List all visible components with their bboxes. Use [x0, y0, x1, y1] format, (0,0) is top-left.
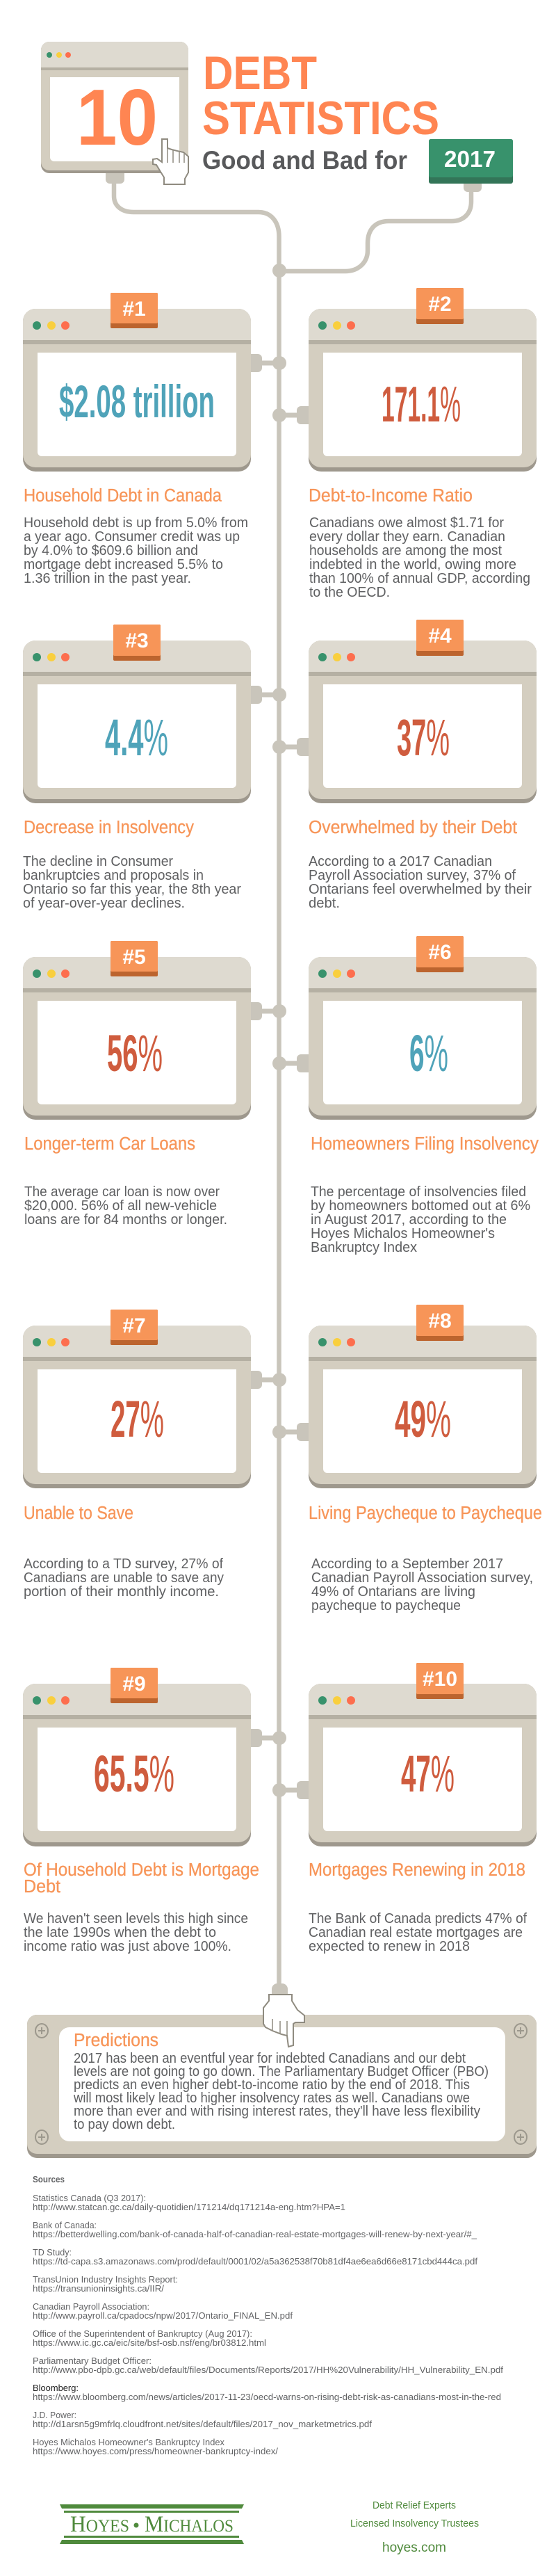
sources: TD Study: [33, 2247, 72, 2257]
sources: http://www.statcan.gc.ca/daily-quotidien/171214/dq171214a-eng.htm?HPA=1 [33, 2202, 345, 2212]
text block [73, 2051, 489, 2132]
sources: https://td-capa.s3.amazonaws.com/prod/default/0001/02/a5a362538f70b81df4ae6ea6d66e8171cbd444ca.pdf [33, 2256, 477, 2267]
panel: statistic 9 [23, 1668, 286, 1954]
window with number 10: 10 [76, 74, 158, 162]
value: $2.08 trillion [59, 376, 215, 427]
text block: According to a 2017 Canadian [309, 853, 492, 869]
footer tagline: Debt Relief Experts [373, 2499, 456, 2511]
sources: Hoyes Michalos Homeowner's Bankruptcy Index [33, 2437, 224, 2447]
text block: The average car loan is now over [24, 1184, 220, 1200]
icon: screws [35, 2024, 527, 2144]
window [23, 957, 251, 1120]
sources: https://transunioninsights.ca/IIR/ [33, 2283, 164, 2294]
sources: http://www.pbo-dpb.gc.ca/web/default/files/Documents/Reports/2017/HH%20Vulnerability/HH_Vulnerability_EN.pdf [33, 2365, 503, 2375]
sources: https://www.hoyes.com/press/homeowner-bankruptcy-index/ [33, 2446, 278, 2456]
panel: predictions [27, 1983, 537, 2158]
badge [416, 620, 464, 656]
window [309, 957, 537, 1120]
heading: Longer-term Car Loans [24, 1134, 195, 1154]
badge: #3 [125, 629, 149, 652]
text block: bankruptcies and proposals in [23, 867, 204, 883]
heading: Mortgages Renewing in 2018 [309, 1860, 525, 1880]
heading: Debt [24, 1877, 60, 1897]
badge [416, 1663, 464, 1699]
panel: statistic 6 [272, 936, 539, 1255]
text block: than 100% of annual GDP, according [309, 570, 530, 586]
text block: Hoyes Michalos Homeowner's [311, 1225, 495, 1241]
badge [416, 1305, 464, 1341]
badge: #8 [428, 1310, 452, 1333]
plug: header window [106, 170, 124, 184]
text block [24, 1184, 227, 1227]
window with number 10 [41, 42, 188, 173]
heading: Of Household Debt is Mortgage [24, 1860, 259, 1880]
window [309, 641, 537, 803]
text block [309, 853, 532, 911]
panel: statistic 1 [23, 293, 286, 586]
sources: Office of the Superintendent of Bankruptcy (Aug 2017): [33, 2328, 252, 2339]
badge [416, 288, 464, 324]
value: 56% [107, 1024, 163, 1082]
title: STATISTICS [202, 92, 439, 145]
panel: statistic 8 [272, 1305, 542, 1613]
badge [111, 1310, 158, 1345]
text block: by homeowners bottomed out at 6% [311, 1198, 530, 1214]
text block: Canadian Payroll Association survey, [311, 1570, 533, 1586]
text block: levels are not going to go down. The Parliamentary Budget Officer (PBO) [74, 2064, 489, 2079]
heading: Predictions [74, 2031, 158, 2050]
panel: statistic 4 [272, 620, 537, 911]
window [23, 309, 251, 472]
text block: more than ever and with rising interest rates, they'll have less flexibility [74, 2104, 480, 2119]
text block: Household debt is up from 5.0% from [24, 515, 248, 531]
panel: statistic 10 [272, 1663, 537, 1954]
value: 65.5% [94, 1745, 174, 1803]
text block: The decline in Consumer [23, 853, 173, 869]
badge: #7 [122, 1314, 146, 1337]
value: 47% [401, 1745, 455, 1803]
text block: 49% of Ontarians are living [311, 1584, 475, 1600]
header wire node [272, 264, 286, 277]
value: 6% [409, 1024, 448, 1082]
connector [272, 738, 309, 756]
text block: debt. [309, 895, 340, 911]
sources: Parliamentary Budget Officer: [33, 2356, 152, 2366]
text block [309, 515, 530, 600]
connector [251, 1002, 286, 1020]
text block [311, 1556, 533, 1613]
sources: https://www.bloomberg.com/news/articles/2017-11-23/oecd-warns-on-rising-debt-risk-as-canadians-most-in-the-red [33, 2392, 501, 2402]
text block: Ontario so far this year, the 8th year [23, 881, 241, 897]
heading: Living Paycheque to Paycheque [309, 1504, 542, 1523]
value: 4.4% [105, 709, 168, 766]
text block: every dollar they earn. Canadian [309, 529, 505, 545]
connector [272, 1423, 309, 1441]
sources: TransUnion Industry Insights Report: [33, 2274, 178, 2285]
year badge [429, 139, 513, 184]
text block: We haven't seen levels this high since [24, 1910, 248, 1926]
header [41, 42, 513, 277]
text block: Canadians are unable to save any [24, 1570, 224, 1586]
icon: pointing hand [263, 1995, 304, 2047]
icon: pointer hand [153, 139, 188, 184]
heading: Unable to Save [24, 1504, 133, 1523]
connector [251, 1371, 286, 1389]
badge: #5 [122, 946, 146, 969]
footer tagline [350, 2499, 479, 2555]
sources: http://d1arsn5g9mfrlq.cloudfront.net/sites/default/files/2017_nov_marketmetrics.pdf [33, 2419, 372, 2429]
badge: #9 [122, 1673, 146, 1696]
text block: paycheque to paycheque [311, 1597, 461, 1613]
badge [111, 941, 158, 976]
window [309, 1684, 537, 1846]
text block: The Bank of Canada predicts 47% of [309, 1910, 527, 1926]
plaque frame [27, 2015, 537, 2158]
logo: Hoyes Michalos: HOYES [70, 2512, 129, 2537]
footer tagline: Licensed Insolvency Trustees [350, 2518, 479, 2529]
heading: Decrease in Insolvency [24, 818, 194, 837]
text block: indebted in the world, owing more [309, 556, 516, 572]
text block: portion of their monthly income. [24, 1584, 219, 1600]
text block: to pay down debt. [74, 2117, 175, 2132]
sources: J.D. Power: [33, 2410, 76, 2420]
value: 49% [395, 1390, 451, 1448]
panel: statistic 2 [272, 288, 537, 600]
sources: http://www.payroll.ca/cpadocs/npw/2017/Ontario_FINAL_EN.pdf [33, 2310, 293, 2321]
plug: year badge [464, 182, 482, 192]
badge [111, 1668, 158, 1703]
value: 27% [111, 1390, 164, 1448]
text block: The percentage of insolvencies filed [311, 1184, 526, 1200]
text block: Ontarians feel overwhelmed by their [309, 881, 532, 897]
text block: mortgage debt increased 5.5% to [24, 556, 223, 572]
panel: statistic 5 [23, 941, 286, 1227]
value: 37% [397, 709, 450, 766]
text block: will most likely lead to higher insolvency rates as well. Canadians owe [73, 2091, 470, 2106]
text block: of year-over-year declines. [23, 895, 185, 911]
sources: Statistics Canada (Q3 2017): [33, 2193, 146, 2203]
text block: Canadians owe almost $1.71 for [309, 515, 504, 531]
sources: https://www.ic.gc.ca/eic/site/bsf-osb.nsf/eng/br03812.html [33, 2337, 266, 2348]
plug: predictions [272, 1983, 288, 1995]
text block: by 4.0% to $609.6 billion and [24, 542, 198, 558]
badge [416, 936, 464, 972]
text block [23, 853, 241, 911]
text block [311, 1184, 530, 1255]
text block: 2017 has been an eventful year for indebted Canadians and our debt [74, 2051, 466, 2066]
badge: #1 [122, 298, 146, 321]
text block: the late 1990s when the debt to [24, 1924, 216, 1940]
sources: https://betterdwelling.com/bank-of-canada-half-of-canadian-real-estate-mortgages-will-renew-by-next-year/#_ [33, 2229, 477, 2239]
value: 171.1% [382, 377, 461, 433]
sources: Sources [33, 2174, 65, 2184]
text block: 1.36 trillion in the past year. [24, 570, 191, 586]
text block [24, 1556, 224, 1600]
title: DEBT [203, 47, 317, 99]
badge [111, 293, 158, 328]
text block: expected to renew in 2018 [309, 1938, 470, 1954]
year badge: 2017 [444, 146, 496, 172]
text block: $20,000. 56% of all new-vehicle [24, 1198, 217, 1214]
heading: Debt-to-Income Ratio [309, 486, 473, 506]
text block: to the OECD. [309, 584, 390, 600]
text block: households are among the most [309, 542, 502, 558]
sources: Canadian Payroll Association: [33, 2301, 149, 2312]
window [309, 1326, 537, 1488]
title: Good and Bad for [202, 146, 407, 175]
connector wires and central line [114, 182, 471, 1986]
sources [33, 2174, 503, 2456]
sources: Bloomberg: [33, 2383, 79, 2393]
connector [272, 1781, 309, 1799]
window [23, 641, 251, 803]
logo: Hoyes Michalos [60, 2504, 244, 2544]
text block: According to a TD survey, 27% of [24, 1556, 223, 1572]
connector [251, 354, 286, 372]
text block [24, 515, 248, 586]
heading: Household Debt in Canada [24, 486, 222, 506]
text block: predicts an even higher debt-to-income ratio by the end of 2018. This [74, 2077, 470, 2093]
text block: Payroll Association survey, 37% of [309, 867, 516, 883]
text block: According to a September 2017 [311, 1556, 503, 1572]
footer tagline: hoyes.com [382, 2541, 446, 2555]
sources: Bank of Canada: [33, 2220, 97, 2230]
connector [272, 1054, 309, 1072]
text block: in August 2017, according to the [311, 1211, 507, 1227]
badge: #6 [428, 941, 452, 964]
heading: Homeowners Filing Insolvency [311, 1134, 539, 1154]
connector [272, 406, 309, 424]
window [23, 1326, 251, 1488]
badge: #4 [428, 625, 452, 647]
text block: Canadian real estate mortgages are [309, 1924, 523, 1940]
title [202, 47, 439, 175]
text block: Bankruptcy Index [311, 1239, 418, 1255]
panel: statistic 3 [23, 625, 286, 911]
badge [113, 625, 161, 661]
text block [309, 1910, 527, 1954]
text block: income ratio was just above 100%. [24, 1938, 231, 1954]
logo: Hoyes Michalos: MICHALOS [145, 2512, 234, 2537]
panel: statistic 7 [23, 1310, 286, 1600]
badge: #2 [428, 293, 452, 316]
text block: a year ago. Consumer credit was up [24, 529, 240, 545]
window [23, 1684, 251, 1846]
badge: #10 [423, 1668, 457, 1691]
text block: loans are for 84 months or longer. [24, 1211, 227, 1227]
connector [251, 1729, 286, 1747]
window [309, 309, 537, 472]
text block [24, 1910, 248, 1954]
heading [24, 1860, 259, 1897]
heading: Overwhelmed by their Debt [309, 818, 517, 837]
connector [251, 686, 286, 704]
